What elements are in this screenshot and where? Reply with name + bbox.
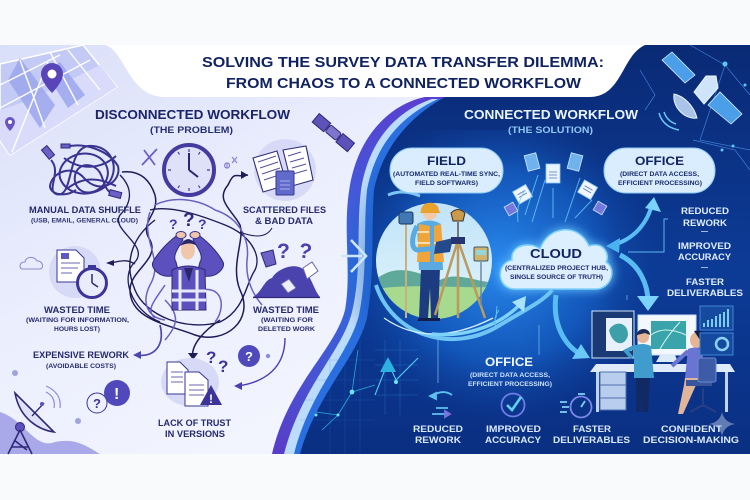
label: lack of trust: LACK OF TRUST: [158, 418, 231, 429]
label: scattered files: & BAD DATA: [255, 216, 314, 226]
question marks above person: ?: [169, 216, 178, 232]
title banner: SOLVING THE SURVEY DATA TRANSFER DILEMMA:: [202, 54, 604, 71]
icon: alert bubbles: ?: [93, 396, 101, 411]
arrow: cloud to desk left: [555, 295, 590, 359]
desk: [590, 364, 735, 412]
question marks above person: ?: [183, 210, 195, 231]
wave border light stripe: [284, 99, 438, 454]
connector lines: [438, 295, 627, 383]
icon: version documents: ?: [206, 348, 216, 367]
woman: [672, 331, 716, 414]
panel: office pill: [604, 148, 715, 193]
benefit labels bottom: IMPROVED: [486, 424, 542, 434]
label: wasted time left: HOURS LOST): [54, 326, 100, 333]
panel: office pill: OFFICE: [635, 154, 684, 168]
panel: field pill: [390, 148, 503, 193]
network decoration: [640, 45, 750, 170]
office caption: (DIRECT DATA ACCESS,: [470, 372, 550, 379]
office caption: OFFICE: [485, 355, 533, 369]
chart: rising line: [375, 340, 418, 415]
title banner: FROM CHAOS TO A CONNECTED WORKFLOW: [226, 75, 582, 92]
panel: office pill: (DIRECT DATA ACCESS,: [620, 171, 699, 178]
arrow: field to cloud: [432, 296, 526, 335]
title banner: [105, 45, 645, 97]
icon: version documents: !: [209, 392, 213, 406]
benefit list right: [667, 206, 743, 298]
icon: trash pile: [253, 239, 320, 298]
surveyor: [413, 203, 453, 321]
question marks above person: [169, 210, 207, 232]
benefit labels bottom: DECISION-MAKING: [643, 435, 739, 445]
label: lack of trust: IN VERSIONS: [165, 429, 225, 440]
question marks above pile: ?: [297, 239, 313, 264]
gauge panel: [700, 333, 733, 355]
icon: version documents: [161, 348, 228, 406]
icon: cloud hub: [500, 228, 613, 290]
icon: cloud outline: [20, 257, 43, 269]
data controller: [474, 247, 488, 305]
icon: question badge: [238, 345, 270, 367]
benefit list right: REWORK: [683, 218, 728, 228]
label: wasted time left: WASTED TIME: [44, 305, 110, 315]
icon: stopwatch and document: [49, 246, 106, 298]
icon: small symbols: [225, 157, 237, 168]
label: wasted time right: DELETED WORK: [258, 326, 315, 333]
label: manual data shuffle: [29, 205, 141, 224]
icon: improved accuracy: [502, 394, 524, 416]
flying files: [504, 153, 607, 222]
panel: connected workflow: [272, 45, 750, 454]
dark navy field: [300, 45, 750, 454]
icon: alert bubbles: [87, 380, 130, 413]
label: manual data shuffle: (USB, EMAIL, GENERAL CLOUD): [31, 218, 138, 224]
icon: cloud hub: SINGLE SOURCE OF TRUTH): [510, 274, 603, 281]
panel: field pill: (AUTOMATED REAL-TIME SYNC,: [393, 171, 500, 178]
blue glow: [352, 130, 633, 404]
icon: cross mark: [142, 149, 157, 165]
arrow: cloud to desk right: [620, 255, 659, 311]
arms: [152, 234, 224, 276]
benefit list right: FASTER: [686, 277, 725, 287]
connected heading: [464, 108, 638, 135]
icon: large map pin: [41, 63, 63, 93]
vest body: [172, 266, 206, 310]
question marks above pile: ?: [277, 240, 290, 263]
panel: field pill: FIELD SOFTWARS): [415, 180, 478, 187]
question marks above pile: [277, 239, 313, 264]
panel: field pill: FIELD: [427, 154, 466, 168]
arrow: centre chevron: [341, 240, 366, 272]
label: expensive rework: EXPENSIVE REWORK: [33, 350, 129, 360]
icon: satellite dish on hill: [0, 370, 100, 454]
icon: map: [0, 45, 117, 155]
benefit list right: REDUCED: [681, 206, 730, 216]
icon: alert bubbles: !: [114, 386, 119, 403]
label: expensive rework: [33, 350, 129, 370]
icon: sparkle watermark: [709, 412, 735, 436]
field arcs: [376, 192, 552, 339]
office workstation: [590, 306, 735, 414]
icon: version documents: ?: [218, 357, 228, 376]
label: wasted time left: (WAITING FOR INFORMATION,: [26, 317, 129, 324]
icon: faster deliverables: [560, 394, 592, 418]
arrow: cloud office two-way: [606, 197, 661, 253]
chart panel: [700, 306, 733, 330]
benefit list right: DELIVERABLES: [667, 288, 743, 298]
connected heading: (THE SOLUTION): [508, 125, 593, 135]
left heading: [95, 108, 290, 135]
panel: office pill: EFFICIENT PROCESSING): [618, 180, 702, 187]
label: scattered files: [243, 205, 326, 226]
left heading: (THE PROBLEM): [150, 125, 233, 135]
icon: clock: [164, 145, 214, 195]
benefit list right: IMPROVED: [678, 241, 732, 251]
wave border purple: [272, 97, 445, 454]
chart: bottom-left grid: [300, 340, 375, 454]
tangled lines around person: [106, 171, 272, 360]
icon: tangled cable: [41, 144, 122, 198]
office caption: [468, 355, 552, 388]
icon: large satellite: [659, 52, 742, 130]
icon: small map pin: [5, 117, 15, 131]
benefit list right: ACCURACY: [678, 252, 731, 262]
icon: stressed person: [152, 210, 224, 310]
icon: cloud hub: (CENTRALIZED PROJECT HUB,: [505, 265, 608, 272]
man: [626, 329, 654, 412]
field scene: [376, 202, 492, 321]
benefit labels bottom: REDUCED: [413, 424, 464, 434]
label: wasted time left: [26, 305, 129, 333]
label: wasted time right: WASTED TIME: [253, 305, 319, 315]
label: manual data shuffle: MANUAL DATA SHUFFLE: [29, 205, 141, 215]
left heading: DISCONNECTED WORKFLOW: [95, 108, 290, 122]
benefit labels bottom: [413, 424, 739, 445]
monitor left: [592, 311, 634, 358]
icon: small satellite: [312, 114, 354, 152]
monitor right: [638, 315, 696, 362]
label: lack of trust: [158, 418, 231, 440]
icon: question badge: ?: [245, 349, 253, 364]
icon: reduced rework: [430, 392, 452, 417]
question marks above person: ?: [198, 216, 207, 232]
label: expensive rework: (AVOIDABLE COSTS): [46, 363, 116, 370]
icon: cloud hub: CLOUD: [530, 246, 582, 261]
label: scattered files: SCATTERED FILES: [243, 205, 326, 215]
benefit labels bottom: CONFIDENT: [661, 424, 723, 434]
bracket: [628, 219, 668, 252]
benefit labels bottom: ACCURACY: [485, 435, 541, 445]
icon: scattered files: [253, 139, 316, 201]
label: wasted time right: [253, 305, 319, 333]
benefit labels bottom: DELIVERABLES: [553, 435, 630, 445]
connected heading: CONNECTED WORKFLOW: [464, 108, 638, 122]
benefit labels bottom: REWORK: [415, 435, 462, 445]
arrow: to lack of trust: [234, 338, 285, 390]
instrument tripod: [435, 210, 485, 318]
benefit labels bottom: FASTER: [573, 424, 612, 434]
office caption: EFFICIENT PROCESSING): [468, 381, 552, 388]
label: wasted time right: (WAITING FOR: [261, 317, 314, 324]
rover pole: [399, 212, 413, 318]
